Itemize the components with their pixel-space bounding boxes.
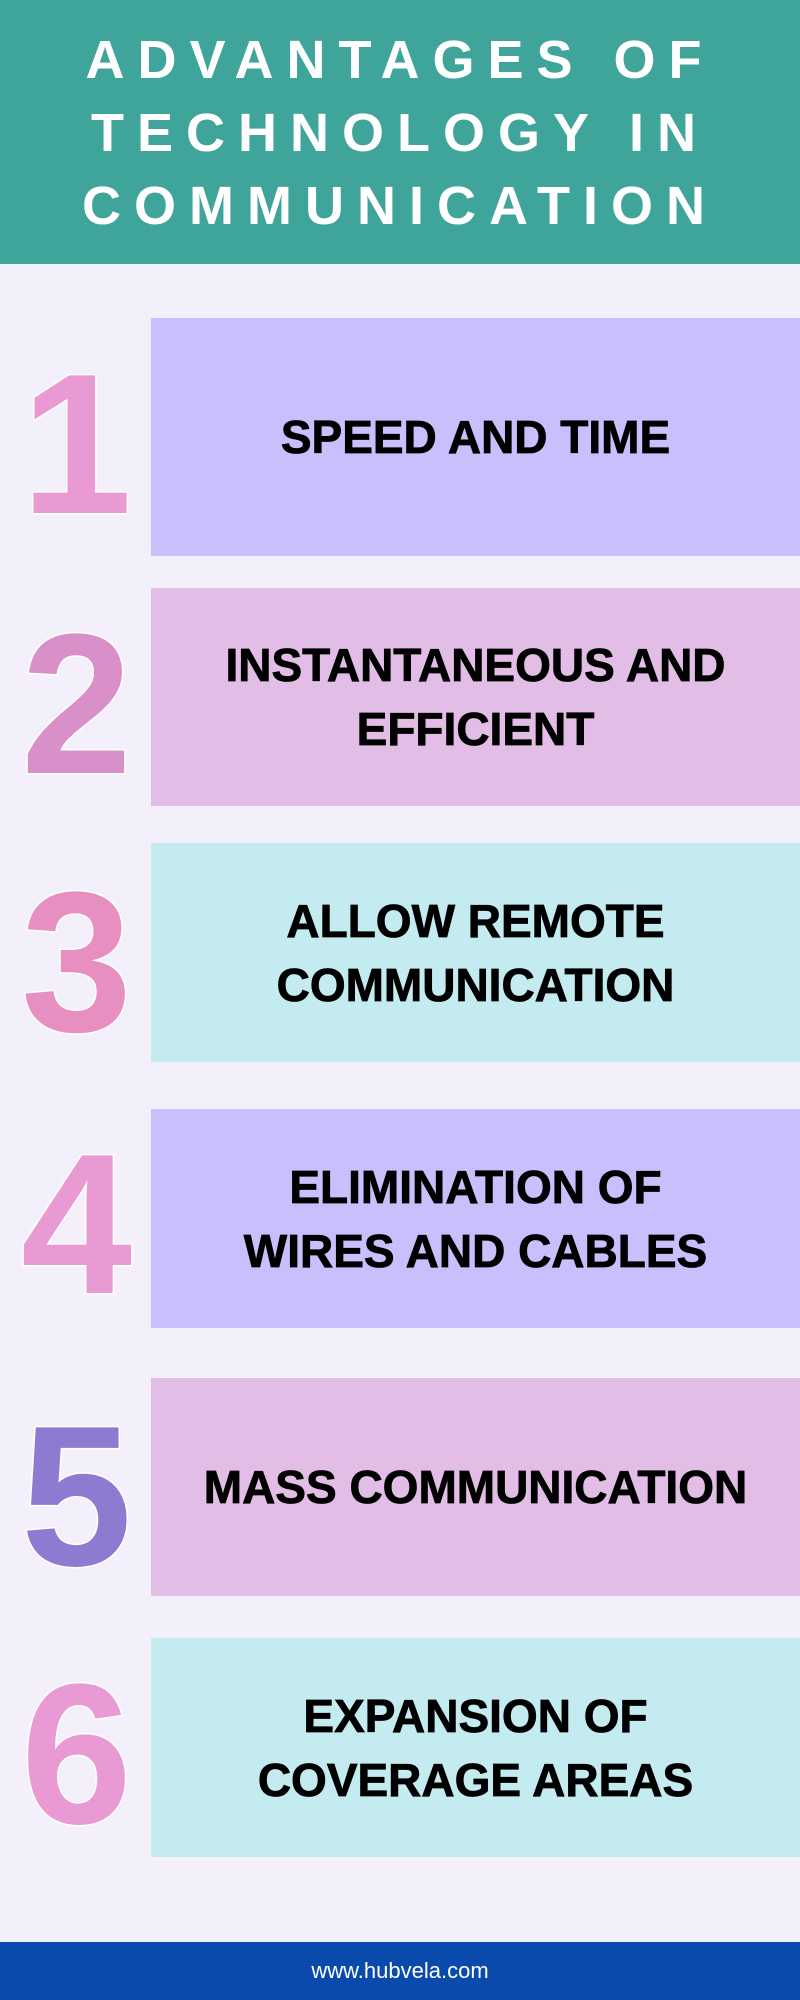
box 6 xyxy=(151,1638,800,1857)
number 5: 5 xyxy=(21,1385,132,1608)
footer xyxy=(0,1942,800,2000)
box 6: COVERAGE AREAS xyxy=(258,1754,693,1806)
title: TECHNOLOGY IN xyxy=(91,103,709,163)
box 4 xyxy=(151,1109,800,1328)
box 4: WIRES AND CABLES xyxy=(244,1224,707,1276)
footer: www.hubvela.com xyxy=(311,1958,489,1983)
box 1: SPEED AND TIME xyxy=(281,411,670,463)
title: ADVANTAGES OF xyxy=(85,30,714,90)
box 3: COMMUNICATION xyxy=(277,958,674,1010)
box 6: EXPANSION OF xyxy=(303,1690,648,1742)
number 3: 3 xyxy=(21,851,132,1074)
box 1 xyxy=(151,318,800,556)
box 4: ELIMINATION OF xyxy=(289,1160,662,1212)
box 5: MASS COMMUNICATION xyxy=(204,1461,747,1513)
box 2 xyxy=(151,588,800,806)
box 3 xyxy=(151,843,800,1062)
number 4: 4 xyxy=(21,1113,132,1336)
number 2: 2 xyxy=(21,593,132,816)
box 3: ALLOW REMOTE xyxy=(286,894,665,946)
number 1: 1 xyxy=(21,333,132,556)
box 2: EFFICIENT xyxy=(357,703,594,755)
box 2: INSTANTANEOUS AND xyxy=(225,639,726,691)
title: COMMUNICATION xyxy=(82,176,718,236)
box 5 xyxy=(151,1378,800,1596)
number 6: 6 xyxy=(21,1643,132,1866)
title xyxy=(0,0,800,264)
